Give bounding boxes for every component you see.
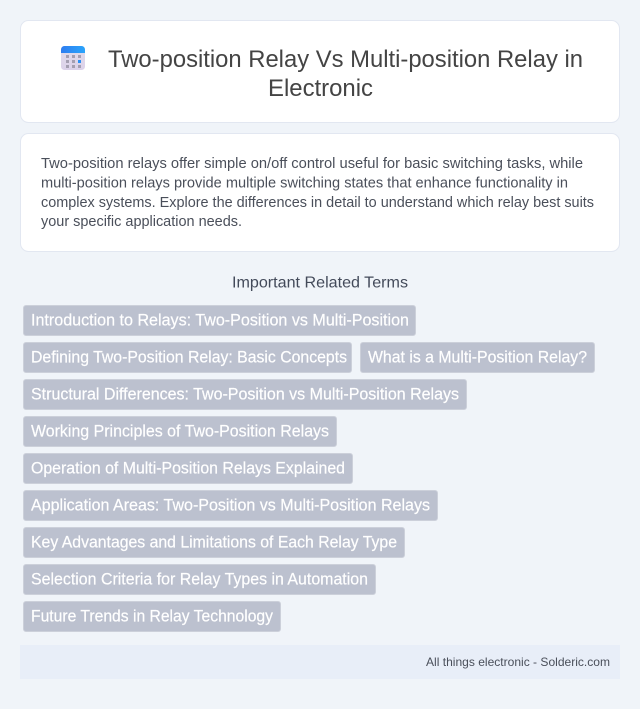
tag: working principles: Working Principles of Two-Position Relays <box>31 422 329 440</box>
text block: description: your specific application needs. <box>41 214 242 230</box>
tag: advantages <box>24 528 404 558</box>
tag: defining two-position relay <box>24 342 352 372</box>
tag: selection criteria: Selection Criteria for Relay Types in Automation <box>31 570 368 588</box>
tag: defining two-position relay: Defining Two-Position Relay: Basic Concepts <box>31 348 347 366</box>
tag: operation: Operation of Multi-Position Relays Explained <box>31 460 345 478</box>
panel: description <box>20 134 620 252</box>
text block: description <box>41 156 594 230</box>
tag: multi-position relay: What is a Multi-Position Relay? <box>368 348 587 366</box>
text block: description: multi-position relays provide multiple switching states that enhance functionality in <box>41 176 568 192</box>
tag: application areas: Application Areas: Two-Position vs Multi-Position Relays <box>31 496 430 514</box>
title: Two-position Relay Vs Multi-position Relay in <box>108 46 583 73</box>
tag: advantages: Key Advantages and Limitations of Each Relay Type <box>31 534 397 552</box>
text block: description: complex systems. Explore the differences in detail to understand which relay best suits <box>41 195 594 211</box>
tag: future trends <box>24 602 280 632</box>
icon: calendar <box>61 46 85 70</box>
tag: application areas <box>24 490 438 520</box>
text block: description: Two-position relays offer simple on/off control useful for basic switching tasks, while <box>41 156 583 172</box>
tag: working principles <box>24 416 336 446</box>
footer <box>20 645 620 679</box>
title <box>108 46 583 102</box>
title: Electronic <box>268 75 373 102</box>
tag: introduction <box>24 306 416 336</box>
panel: title card <box>20 20 620 122</box>
tag list <box>24 306 594 632</box>
tag: structural differences: Structural Differences: Two-Position vs Multi-Position Relays <box>31 386 459 404</box>
tag: operation <box>24 454 352 484</box>
heading: important related terms: Important Related Terms <box>232 274 408 292</box>
tag: multi-position relay <box>360 342 594 372</box>
tag: selection criteria <box>24 564 376 594</box>
tag: future trends: Future Trends in Relay Technology <box>31 608 274 626</box>
tag: structural differences <box>24 380 466 410</box>
tag: introduction: Introduction to Relays: Two-Position vs Multi-Position <box>31 312 409 330</box>
footer: All things electronic - Solderic.com <box>426 655 610 669</box>
